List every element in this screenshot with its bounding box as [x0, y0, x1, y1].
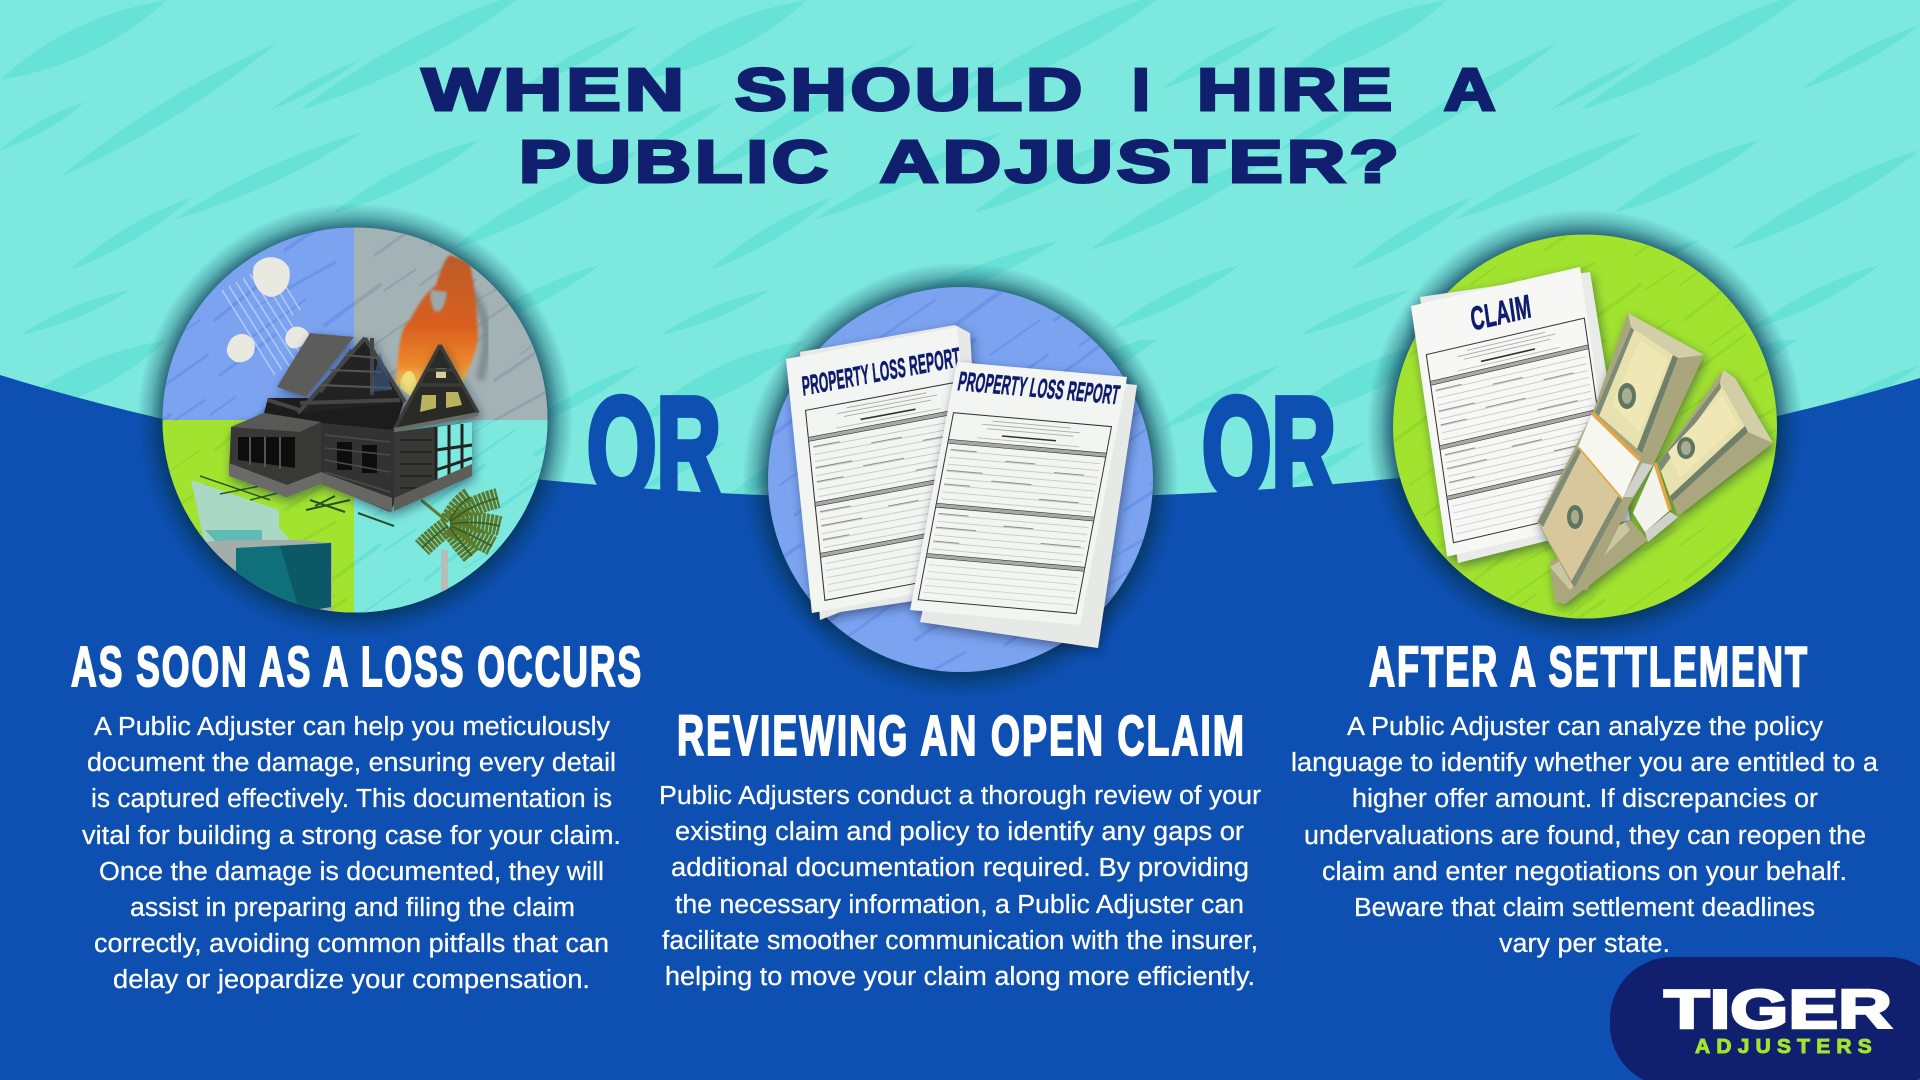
body text: delay or jeopardize your compensation. [113, 966, 590, 994]
document: left report: PROPERTY LOSS REPORT [800, 341, 962, 402]
icon: water flood [191, 475, 394, 612]
OR connector left: OR [587, 368, 721, 525]
panel: as soon as a loss occurs [71, 203, 643, 994]
body text: undervaluations are found, they can reopen the [1304, 822, 1866, 850]
heading: REVIEWING AN OPEN CLAIM [677, 704, 1246, 768]
body text: facilitate smoother communication with the insurer, [662, 927, 1258, 955]
body text: the necessary information, a Public Adjuster can [675, 891, 1244, 919]
body text: Once the damage is documented, they will [99, 858, 604, 886]
illustration: damaged house circle [137, 203, 573, 639]
body text: vary per state. [1499, 930, 1670, 958]
title: SHOULD [735, 57, 1086, 123]
panel: after a settlement [1291, 210, 1879, 958]
illustration: property loss reports circle: PROPERTY LOSS REPORT [956, 365, 1122, 410]
body text: is captured effectively. This documentation is [91, 785, 612, 813]
icon: burned house [229, 333, 478, 512]
body text [1291, 713, 1879, 958]
body text: language to identify whether you are entitled to a [1291, 749, 1879, 777]
OR connector right: OR [1202, 368, 1336, 525]
title: PUBLIC [519, 129, 832, 195]
illustration: claim and money circle [1367, 210, 1803, 646]
body text: A Public Adjuster can help you meticulously [94, 713, 610, 741]
icon: palm tree [421, 497, 500, 598]
body text: document the damage, ensuring every detail [87, 749, 616, 777]
body text [82, 713, 621, 994]
title: A [1444, 57, 1499, 123]
document: left report [786, 325, 987, 620]
body text: Beware that claim settlement deadlines [1354, 894, 1815, 922]
body text: higher offer amount. If discrepancies or [1352, 785, 1819, 813]
document: claim form [1411, 267, 1630, 563]
icon: hail [222, 257, 310, 375]
icon: money stacks [1537, 313, 1773, 604]
body text: existing claim and policy to identify any gaps or [675, 818, 1245, 846]
body text: helping to move your claim along more efficiently. [665, 963, 1255, 991]
title: HIRE [1197, 57, 1396, 123]
title [422, 57, 1499, 195]
body text: claim and enter negotiations on your behalf. [1322, 858, 1847, 886]
title: I [1132, 57, 1153, 123]
logo: Tiger Adjusters [1610, 957, 1920, 1080]
body text: assist in preparing and filing the claim [130, 894, 575, 922]
logo: Tiger Adjusters: TIGER [1664, 978, 1892, 1040]
document: right report [910, 362, 1137, 648]
title: ADJUSTER? [880, 129, 1403, 195]
document: claim form: CLAIM [1468, 288, 1534, 338]
body text: A Public Adjuster can analyze the policy [1347, 713, 1823, 741]
body text: vital for building a strong case for your claim. [82, 822, 621, 850]
body text: Public Adjusters conduct a thorough review of your [659, 782, 1262, 810]
body text: additional documentation required. By providing [671, 854, 1249, 882]
logo: Tiger Adjusters: ADJUSTERS [1695, 1036, 1878, 1058]
lower stack remainder [1550, 520, 1648, 604]
second stack [1658, 370, 1773, 516]
heading: AS SOON AS A LOSS OCCURS [71, 635, 643, 699]
title: WHEN [422, 57, 688, 123]
body text: correctly, avoiding common pitfalls that can [94, 930, 609, 958]
panel: reviewing an open claim [659, 262, 1262, 991]
first stack [1537, 313, 1704, 590]
body text [659, 782, 1262, 991]
illustration: property loss reports circle [742, 262, 1178, 698]
icon: fire and smoke [395, 255, 486, 396]
background: dark blue wave [0, 375, 1920, 1080]
background: teal sky [0, 0, 1920, 660]
